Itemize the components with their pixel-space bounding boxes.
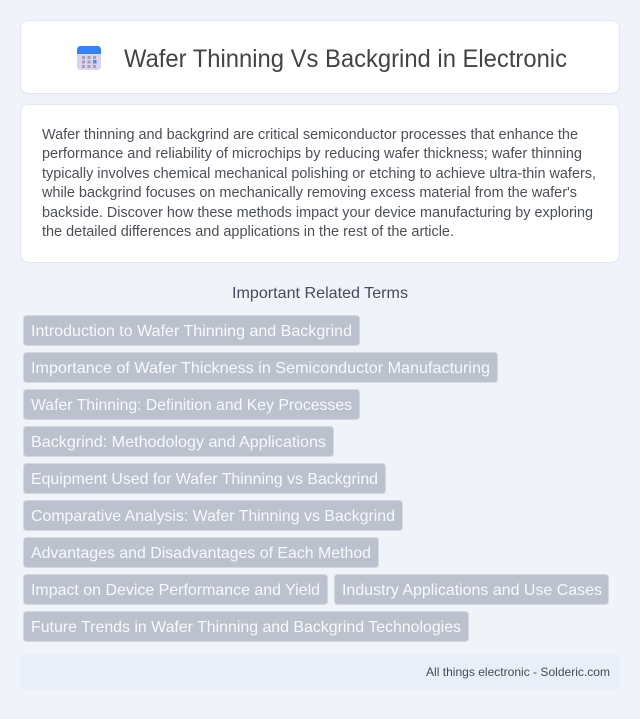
text block: intro: Wafer thinning and backgrind are critical semiconductor processes that enhance the <box>42 127 578 143</box>
tag: Impact on Device Performance and Yield <box>31 582 320 599</box>
tag <box>24 538 378 568</box>
text block: intro: the detailed differences and applications in the rest of the article. <box>42 224 454 240</box>
heading: related terms: Important Related Terms <box>232 285 408 302</box>
tag: Introduction to Wafer Thinning and Backgrind <box>31 323 352 340</box>
tag <box>24 500 402 530</box>
tag <box>24 612 468 642</box>
tag: Advantages and Disadvantages of Each Method <box>31 545 371 562</box>
tag <box>24 316 360 346</box>
panel: title header <box>20 20 620 94</box>
tag <box>334 574 608 604</box>
tag: Comparative Analysis: Wafer Thinning vs Backgrind <box>31 508 395 525</box>
tag: Importance of Wafer Thickness in Semiconductor Manufacturing <box>31 360 490 377</box>
text block: intro: performance and reliability of microchips by reducing wafer thickness; wafer thinning <box>42 146 582 162</box>
tag <box>24 426 334 456</box>
footer credit: All things electronic - Solderic.com <box>426 665 610 679</box>
icon: calendar <box>77 46 101 70</box>
text block: intro: while backgrind focuses on mechanically removing excess material from the wafer's <box>41 185 577 201</box>
title: Wafer Thinning Vs Backgrind in Electronic <box>124 45 567 73</box>
text block: intro <box>41 127 596 240</box>
tag: Wafer Thinning: Definition and Key Processes <box>31 397 352 414</box>
tag list: related terms <box>24 316 608 642</box>
tag: Equipment Used for Wafer Thinning vs Backgrind <box>31 471 378 488</box>
panel: intro paragraph <box>20 104 620 262</box>
tag: Backgrind: Methodology and Applications <box>31 434 326 451</box>
tag <box>24 352 498 382</box>
text block: intro: backside. Discover how these methods impact your device manufacturing by exploring <box>42 205 593 221</box>
footer <box>20 655 620 689</box>
tag: Future Trends in Wafer Thinning and Backgrind Technologies <box>31 619 461 636</box>
tag <box>24 390 360 420</box>
tag <box>24 574 328 604</box>
text block: intro: typically involves chemical mechanical polishing or etching to achieve ultra-thin wafers, <box>42 166 596 182</box>
tag <box>24 464 386 494</box>
tag: Industry Applications and Use Cases <box>342 582 602 599</box>
